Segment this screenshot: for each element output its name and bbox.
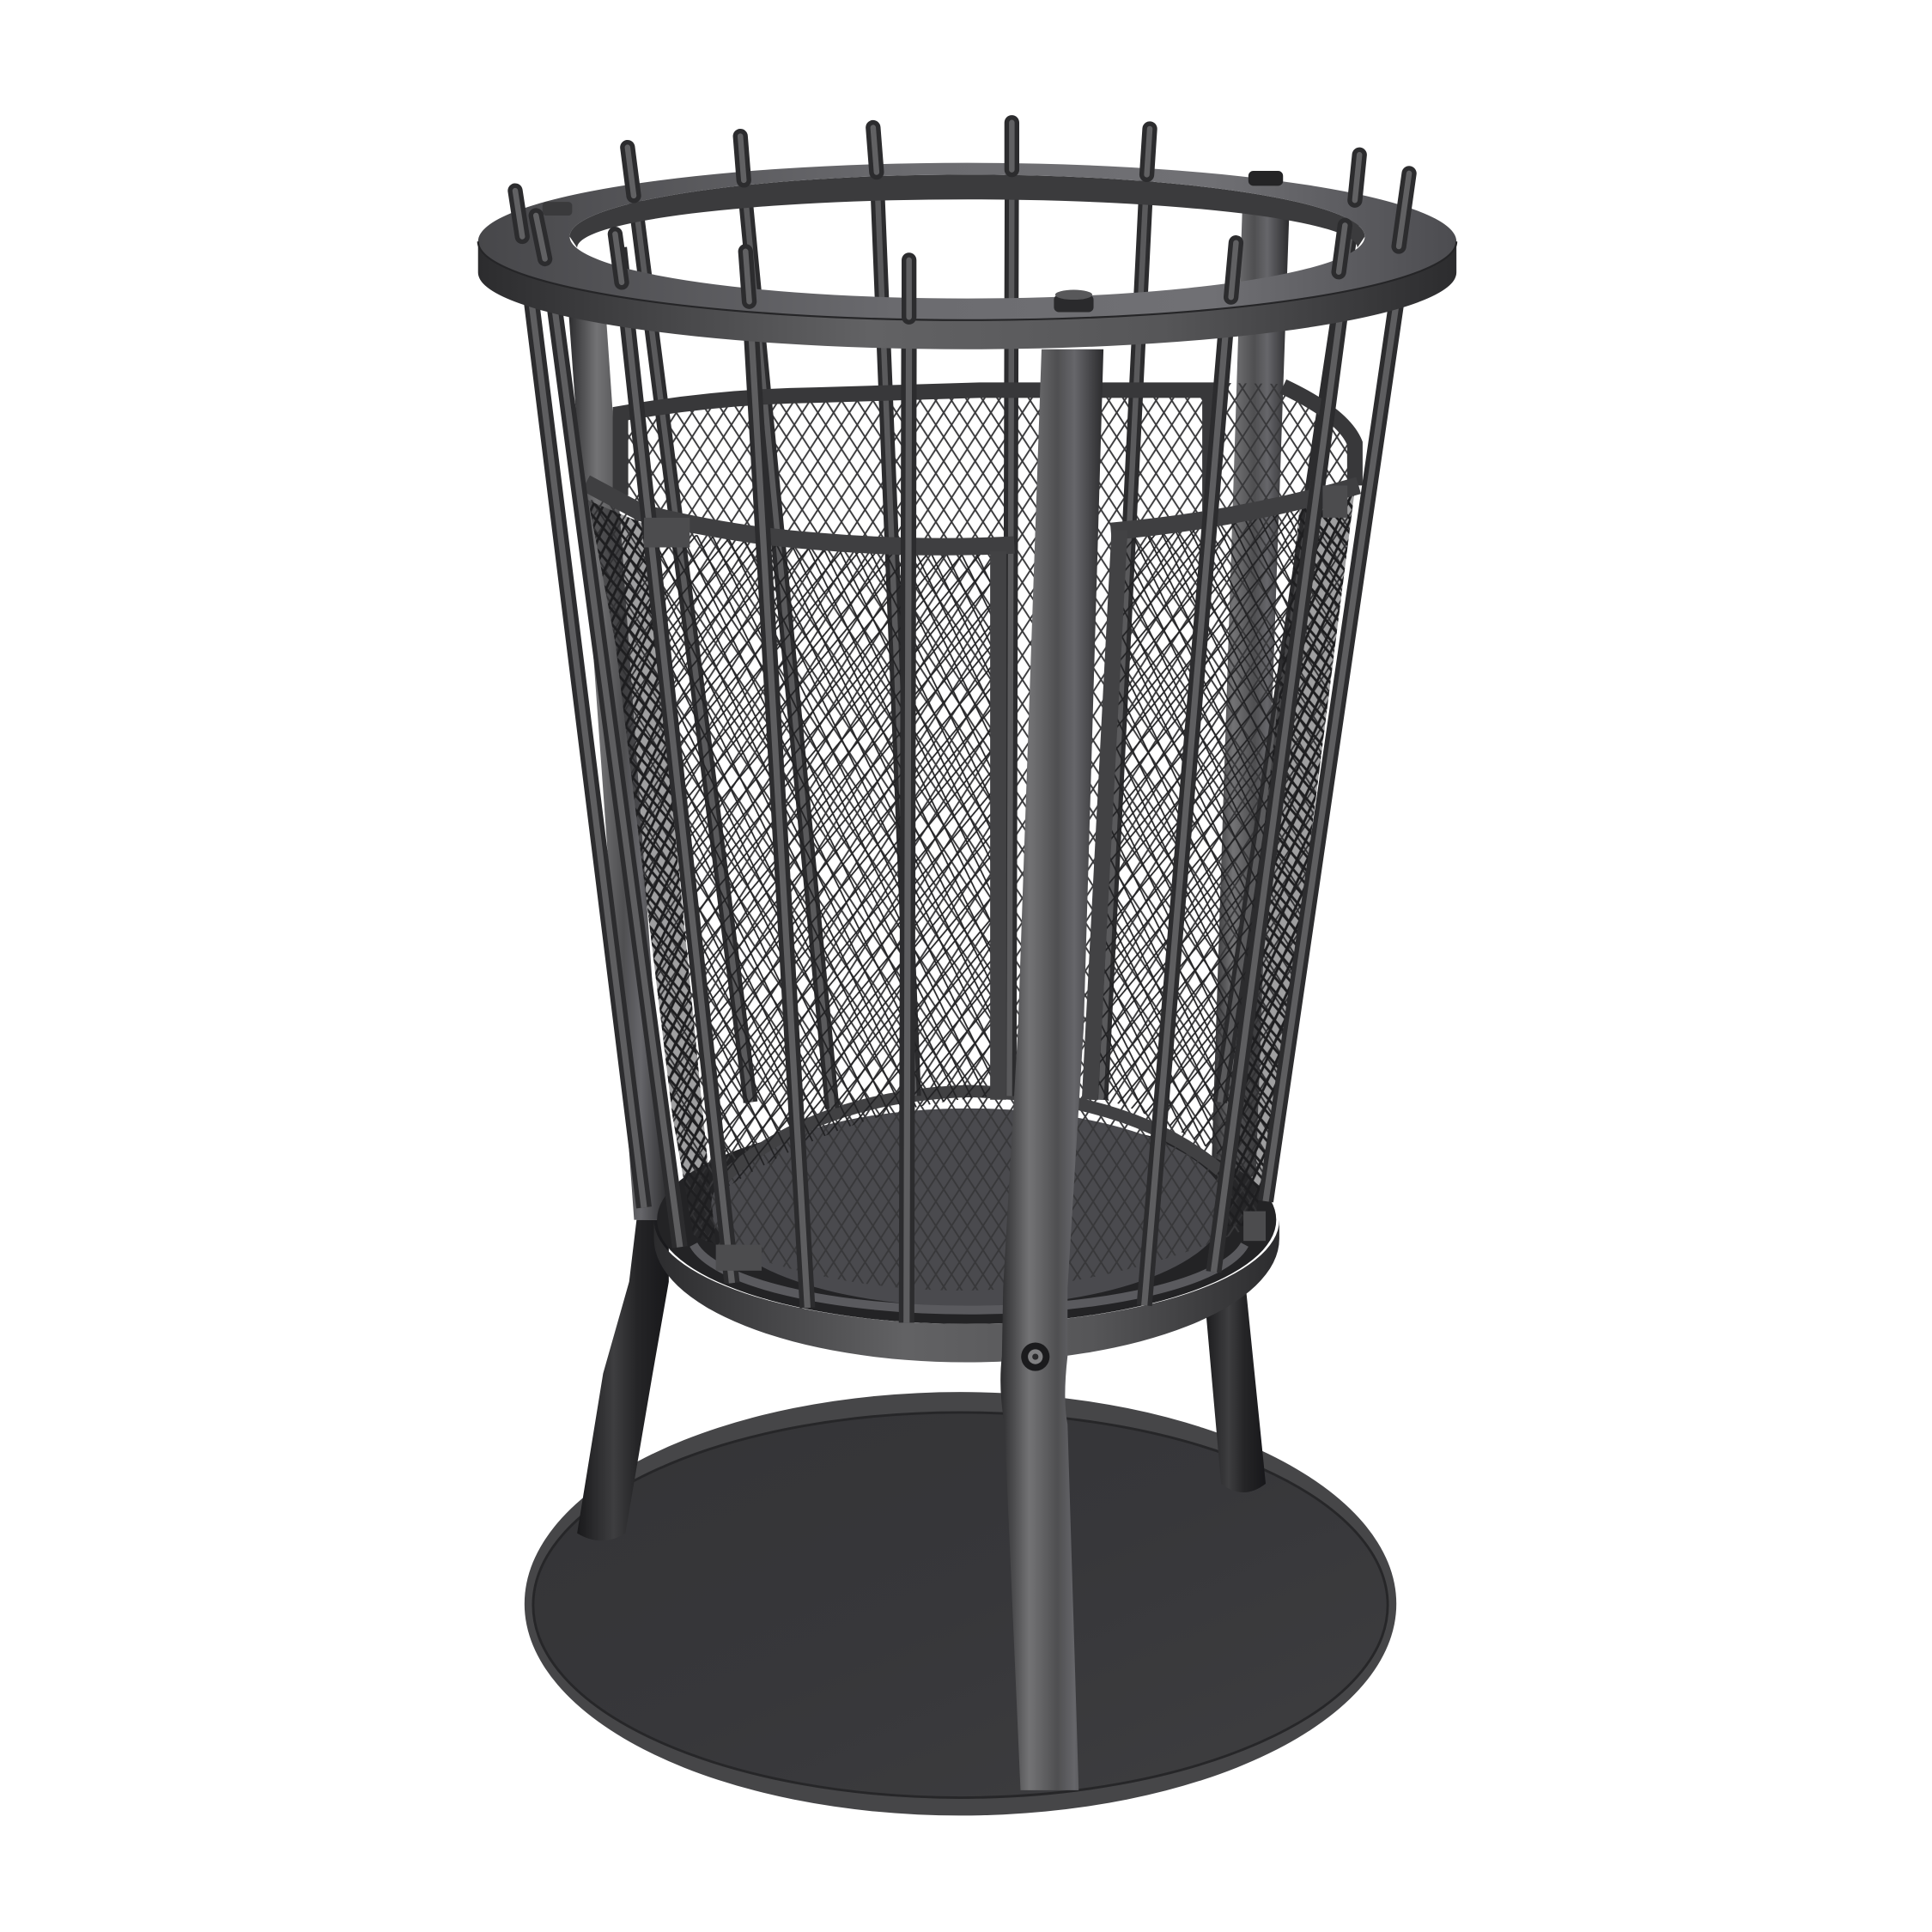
bottom ring xyxy=(654,1220,1279,1363)
left rear pillar xyxy=(568,310,669,1220)
ring interior xyxy=(657,1116,1276,1324)
tray: ash pan xyxy=(525,1392,1396,1815)
right rear pillar xyxy=(1212,213,1289,1176)
inner basket middle hoop xyxy=(586,483,1358,547)
back right leg xyxy=(1204,1288,1266,1492)
ring flat surface xyxy=(478,163,1456,320)
rod clips xyxy=(644,485,1347,1271)
ring inner wall xyxy=(569,174,1364,247)
front mesh side panels xyxy=(588,489,1355,1245)
back rods xyxy=(634,173,1355,1109)
inner basket top hoop xyxy=(621,386,1355,518)
small side bolt xyxy=(634,1176,647,1189)
leg bolt xyxy=(1021,1342,1049,1371)
upright pins xyxy=(515,123,1409,317)
top ring xyxy=(478,163,1456,349)
back mesh panel xyxy=(588,383,1355,1291)
floor hoop xyxy=(725,1091,1220,1176)
back left leg xyxy=(577,1220,669,1540)
ring edge line xyxy=(478,241,1456,320)
ring bolts xyxy=(543,171,1283,312)
front rods xyxy=(526,247,1405,1322)
ring outer band xyxy=(478,241,1456,349)
front leg xyxy=(1000,349,1103,1790)
basket floor xyxy=(711,1109,1226,1307)
front panel edges xyxy=(998,530,1120,1100)
